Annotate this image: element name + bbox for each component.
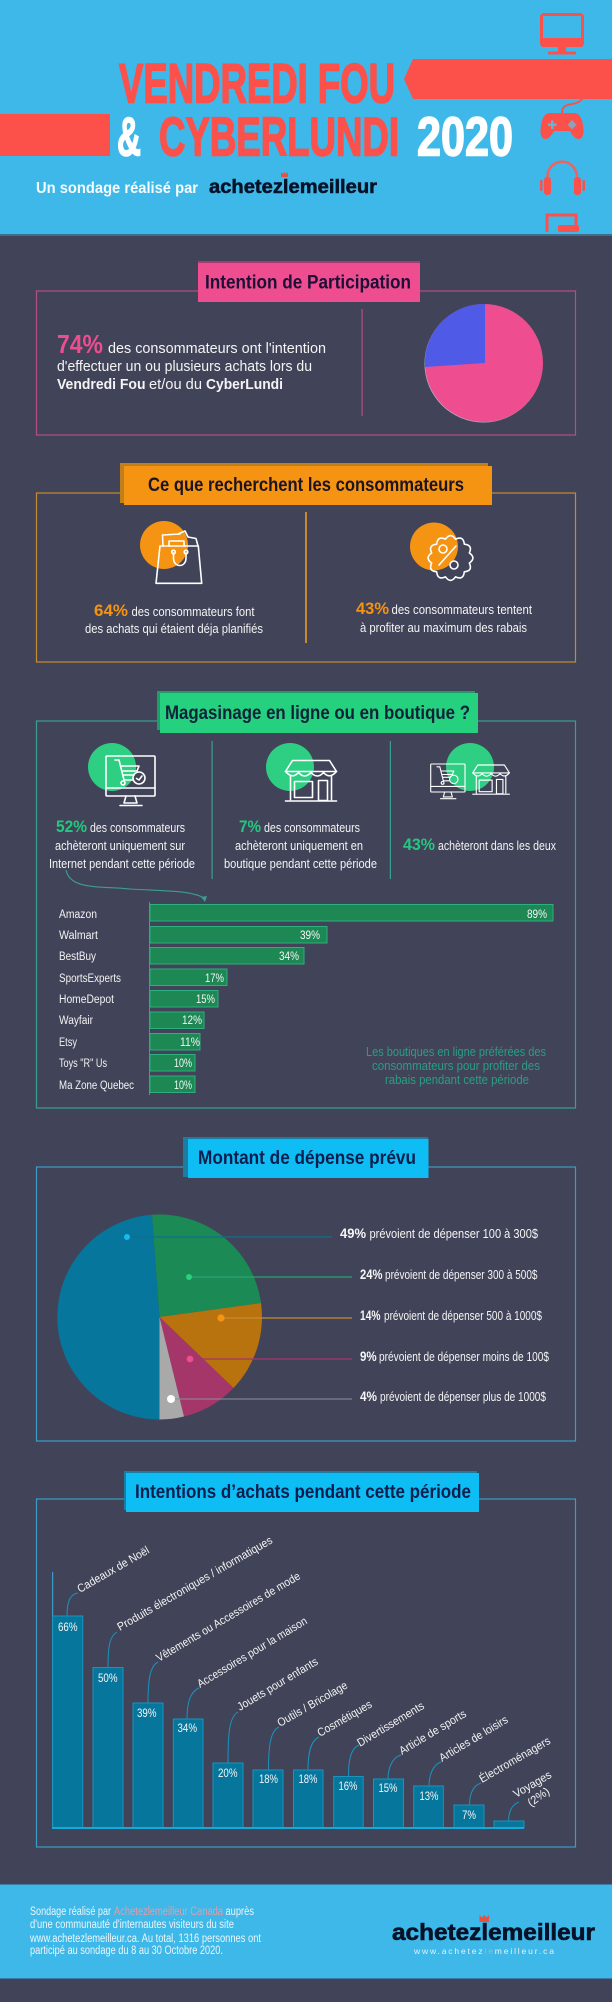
category labels: Électroménagers <box>477 1734 553 1786</box>
bar values: 11% <box>180 1037 200 1049</box>
heading: Montant de dépense prévu <box>198 1148 416 1169</box>
panel: magasinage en ligne ou en boutique <box>36 691 576 1108</box>
legend: 9% <box>187 1348 549 1364</box>
title: 2020 <box>417 106 513 168</box>
panel: intentions d'achats <box>36 1471 576 1847</box>
note: rabais pendant cette période <box>385 1073 529 1087</box>
bar values: 18% <box>259 1774 278 1786</box>
legend: 14% <box>217 1307 542 1323</box>
survey note <box>29 1906 262 1957</box>
text: 52% <box>49 817 195 871</box>
icon: monitor and store <box>431 743 509 799</box>
survey note: participé au sondage du 8 au 30 Octobre 2020. <box>30 1945 223 1957</box>
text: 52%: achèteront uniquement sur <box>55 839 185 853</box>
bar values: 34% <box>178 1723 197 1735</box>
text block: des consommateurs ont l'intention <box>108 340 326 357</box>
legend: 49% <box>124 1225 538 1241</box>
heading <box>124 1471 479 1512</box>
survey note: d'une communauté d'internautes visiteurs du site <box>30 1919 234 1931</box>
bar labels: Ma Zone Quebec <box>59 1080 134 1092</box>
text: 64%: des consommateurs font <box>132 605 255 619</box>
bar values: 10% <box>174 1080 192 1092</box>
legend: 24%: prévoient de dépenser 300 à 500$ <box>385 1268 538 1282</box>
panel: intention de participation <box>36 261 576 435</box>
legend: 9%: prévoient de dépenser moins de 100$ <box>379 1350 549 1364</box>
bar values: 18% <box>298 1774 318 1786</box>
heading: Intention de Participation <box>205 272 411 294</box>
panel: ce que recherchent les consommateurs <box>36 463 576 662</box>
heading: Ce que recherchent les consommateurs <box>148 475 464 496</box>
survey note: Sondage réalisé par <box>30 1906 111 1918</box>
category labels: Jouets pour enfants <box>235 1656 321 1714</box>
bar labels: SportsExperts <box>59 973 121 985</box>
category labels <box>76 1535 554 1809</box>
footer logo: www.achetezlemeilleur.ca <box>413 1946 554 1956</box>
title: VENDREDI FOU <box>119 52 395 114</box>
category labels: Accessoires pour la maison <box>195 1615 310 1691</box>
note: consommateurs pour profiter des <box>372 1059 540 1073</box>
category labels: Vêtements ou Accessoires de mode <box>154 1571 303 1665</box>
bar values <box>174 909 547 1092</box>
category labels: Voyages <box>512 1769 554 1801</box>
heading <box>157 691 478 733</box>
text: 43%: des consommateurs tentent <box>392 603 532 617</box>
text: 7%: boutique pendant cette période <box>224 857 377 871</box>
panel: montant de depense prevu <box>36 1137 576 1441</box>
bar values: 89% <box>527 909 547 921</box>
connectors <box>67 1593 519 1821</box>
note <box>366 1045 546 1087</box>
icon: headphones <box>540 162 585 195</box>
text block: CyberLundi <box>206 376 283 393</box>
bar values: 7% <box>462 1810 476 1822</box>
category labels: Produits électroniques / informatiques <box>116 1535 275 1634</box>
text: 7%: achèteront uniquement en <box>235 839 363 853</box>
icon: laptop <box>547 215 579 232</box>
bar labels: BestBuy <box>59 951 96 963</box>
title bar right <box>404 59 612 99</box>
pie chart: 74% <box>424 304 543 422</box>
legend: 14%: prévoient de dépenser 500 à 1000$ <box>384 1309 542 1323</box>
text block: 74% <box>57 329 103 359</box>
text: 43%: 43% <box>356 599 389 618</box>
legend: 49%: prévoient de dépenser 100 à 300$ <box>370 1227 538 1241</box>
heading <box>198 261 420 302</box>
text: 7%: 7% <box>239 817 261 836</box>
arrow <box>66 870 207 902</box>
title <box>117 52 513 168</box>
text: 7%: des consommateurs <box>264 821 360 835</box>
category labels: Divertissements <box>355 1700 427 1750</box>
category labels: Articles de loisirs <box>437 1714 511 1765</box>
survey note: Achetezlemeilleur Canada <box>114 1906 223 1918</box>
text: 43% <box>403 835 557 854</box>
icon: monitor <box>541 14 583 54</box>
legend: 4%: 4% <box>360 1388 377 1404</box>
text block <box>57 329 326 393</box>
text: 64%: 64% <box>94 601 128 620</box>
category labels: Cadeaux de Noël <box>76 1545 152 1596</box>
bar values: 20% <box>218 1768 238 1780</box>
text block: Vendredi Fou <box>57 376 146 393</box>
bar labels: HomeDepot <box>59 994 115 1006</box>
bar labels: Toys "R" Us <box>59 1058 107 1070</box>
text: 43% <box>356 599 532 635</box>
bar values: 39% <box>137 1708 156 1720</box>
bar values: 13% <box>420 1791 438 1803</box>
legend: 24% <box>186 1266 538 1282</box>
legend: 49%: 49% <box>340 1225 367 1241</box>
bar labels: Wayfair <box>59 1015 93 1027</box>
title bar left <box>0 114 110 156</box>
bar values <box>58 1622 476 1822</box>
bar values: 15% <box>196 994 215 1006</box>
bar values: 50% <box>98 1673 118 1685</box>
legend: 24%: 24% <box>360 1266 383 1282</box>
bar values: 15% <box>378 1783 398 1795</box>
bar labels: Walmart <box>59 930 99 942</box>
survey note: auprès <box>226 1906 254 1918</box>
text: 43%: 43% <box>403 835 435 854</box>
header banner <box>0 0 612 236</box>
icon: discount badge <box>410 522 473 580</box>
heading <box>183 1137 428 1178</box>
text: 43%: à profiter au maximum des rabais <box>360 621 527 635</box>
category labels: Cosmétiques <box>316 1699 375 1740</box>
bar chart: boutiques en ligne <box>59 902 553 1095</box>
text block: et/ou du <box>149 376 202 393</box>
pie chart: spending <box>57 1215 262 1420</box>
icon: online shopping monitor <box>88 743 155 806</box>
bar values: 12% <box>182 1015 202 1027</box>
legend: 9%: 9% <box>360 1348 377 1364</box>
bar values: 10% <box>174 1058 192 1070</box>
survey note: www.achetezlemeilleur.ca. Au total, 1316 personnes ont <box>29 1933 262 1945</box>
heading: Intentions d’achats pendant cette période <box>135 1482 471 1503</box>
footer logo <box>392 1915 595 1956</box>
text: 64%: des achats qui étaient déja planifiés <box>85 622 263 636</box>
footer <box>0 1884 612 1979</box>
logo: achetezlemeilleur <box>209 177 378 198</box>
bar values: 17% <box>205 973 224 985</box>
bar values: 34% <box>279 951 299 963</box>
heading: Magasinage en ligne ou en boutique ? <box>165 703 470 724</box>
text: 52%: Internet pendant cette période <box>49 857 195 871</box>
category labels: (2%) <box>526 1786 552 1809</box>
bar values: 66% <box>58 1622 78 1634</box>
subtitle: Un sondage réalisé par <box>36 180 198 197</box>
legend: 4% <box>167 1388 546 1404</box>
note: Les boutiques en ligne préférées des <box>366 1045 546 1059</box>
text: 52%: 52% <box>56 817 87 836</box>
category labels: Article de sports <box>397 1708 469 1758</box>
bar values: 16% <box>338 1781 358 1793</box>
title: CYBERLUNDI <box>159 106 399 168</box>
bar labels <box>59 909 134 1092</box>
category labels: Outils / Bricolage <box>276 1680 350 1730</box>
text: 64% <box>85 601 263 636</box>
text: 43%: achèteront dans les deux <box>438 839 557 853</box>
bar chart: purchases <box>52 1535 554 1829</box>
text: 7% <box>224 817 377 871</box>
icon: store <box>266 743 336 801</box>
text: 52%: des consommateurs <box>90 821 185 835</box>
title: & <box>117 106 141 168</box>
icon: shopping bag <box>140 521 202 583</box>
legend: 14%: 14% <box>360 1307 381 1323</box>
bar labels: Etsy <box>59 1037 77 1049</box>
icon: game controller <box>540 99 584 139</box>
text block: d'effectuer un ou plusieurs achats lors du <box>57 358 312 375</box>
legend: 4%: prévoient de dépenser plus de 1000$ <box>380 1390 546 1404</box>
heading <box>120 463 492 505</box>
bar values: 39% <box>300 930 320 942</box>
footer logo: achetezlemeilleur <box>392 1919 595 1945</box>
bar labels: Amazon <box>59 909 97 921</box>
